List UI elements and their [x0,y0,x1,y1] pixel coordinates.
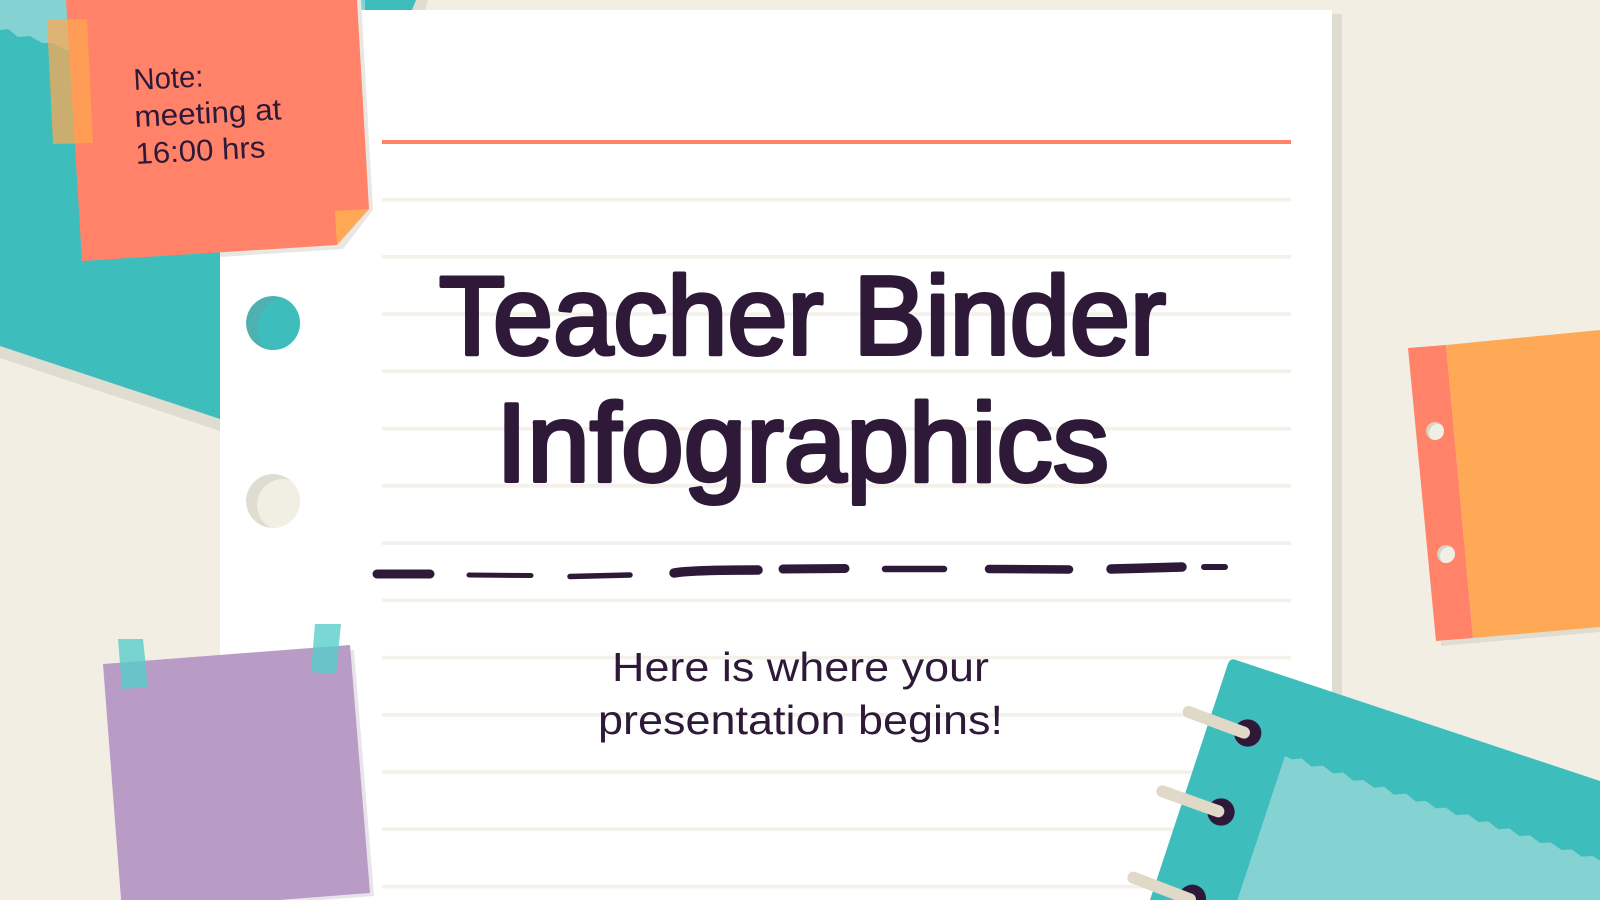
subtitle: Here is where your [612,644,989,690]
subtitle: presentation begins! [598,697,1003,743]
orange tape [47,19,93,144]
punch hole 1 [1426,422,1444,440]
teal tape right [311,624,341,674]
header rule [382,140,1291,144]
binder hole: cream [246,474,300,528]
title [439,254,1166,505]
punch hole 2 [1437,545,1455,563]
spiral ring 2 [1162,791,1235,826]
panel: purple sticky note [103,645,374,900]
title: Infographics [496,381,1109,505]
panel: orange binder divider [1408,330,1600,646]
panel: coral sticky note [66,0,373,261]
spiral ring 1 [1189,712,1261,747]
note text: Note: [133,60,204,97]
teal tape left [118,639,148,689]
panel: paper sheet [220,0,1342,900]
note text: meeting at [134,93,283,134]
note text: 16:00 hrs [135,131,266,171]
hand-drawn dashed divider [377,567,1225,576]
subtitle [598,644,1003,743]
panel: teal folder behind paper [0,0,428,431]
panel: teal spiral notebook [1133,659,1600,900]
spiral ring 3 [1133,878,1206,900]
note text [133,60,283,171]
binder hole: teal [246,296,300,350]
torn inner page [1237,756,1600,900]
title: Teacher Binder [439,254,1166,378]
ruled lines on paper [382,198,1291,888]
